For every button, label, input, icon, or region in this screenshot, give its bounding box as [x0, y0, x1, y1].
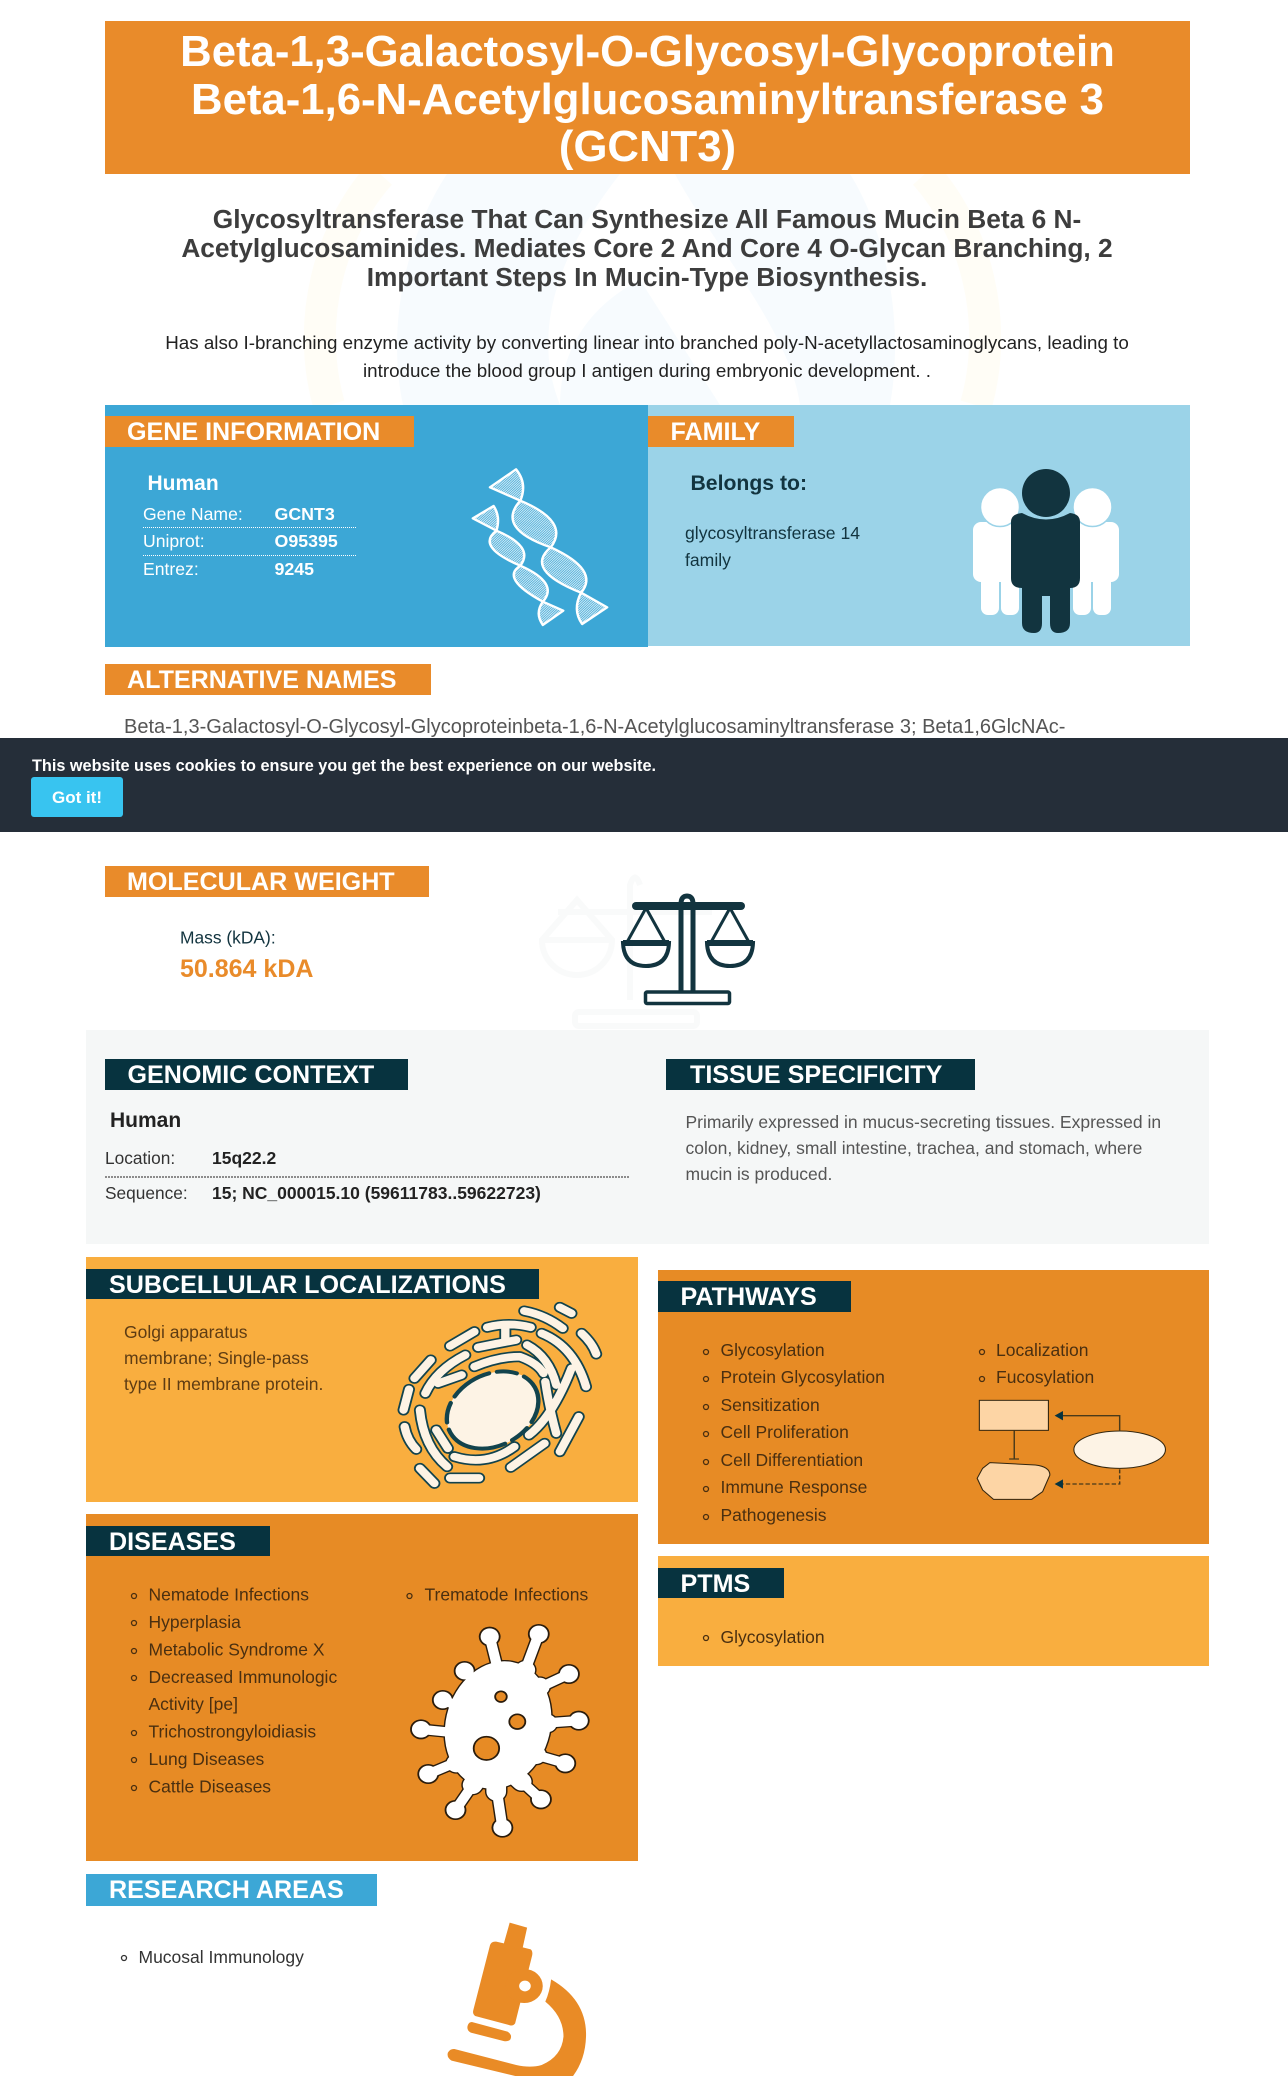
heading: subcellular localizations: SUBCELLULAR LOCALIZATIONS	[109, 1271, 506, 1299]
heading: family	[648, 416, 794, 447]
icon: microscope	[448, 1922, 586, 2076]
tissue specificity text: mucin is produced.	[686, 1164, 832, 1184]
diseases list	[132, 1584, 588, 1796]
pathways list	[704, 1340, 1094, 1525]
pathways list: Glycosylation	[720, 1340, 825, 1360]
title banner	[105, 21, 1190, 174]
tissue specificity text: colon, kidney, small intestine, trachea, and stomach, where	[686, 1138, 1142, 1158]
button: got it: Got it!	[52, 788, 102, 807]
cookie bar: This website uses cookies to ensure you get the best experience on our website.	[32, 757, 656, 775]
faint scale watermark	[542, 878, 712, 1026]
diseases list: Lung Diseases	[148, 1749, 265, 1769]
panel: pathways	[658, 1270, 1209, 1544]
ptms list: Glycosylation	[720, 1627, 825, 1647]
molecular weight value: Mass (kDA):	[180, 928, 276, 948]
heading: tissue specificity: TISSUE SPECIFICITY	[690, 1061, 943, 1089]
molecular weight value	[180, 928, 313, 983]
genomic context details: Human	[110, 1109, 181, 1132]
title banner: Beta-1,6-N-Acetylglucosaminyltransferase 3	[191, 75, 1104, 124]
research areas list: Mucosal Immunology	[138, 1947, 304, 1967]
diseases list: Hyperplasia	[148, 1612, 241, 1632]
pathways list: Sensitization	[720, 1395, 820, 1415]
gene table: 9245	[274, 559, 314, 579]
family text: Belongs to:	[690, 472, 807, 495]
subtitle: Acetylglucosaminides. Mediates Core 2 And Core 4 O-Glycan Branching, 2	[181, 233, 1113, 263]
pathways list: Immune Response	[720, 1477, 867, 1497]
icon: virus	[410, 1624, 590, 1838]
description: Has also I-branching enzyme activity by converting linear into branched poly-N-acetyllactosaminoglycans, leading to	[165, 332, 1129, 353]
heading: molecular weight: MOLECULAR WEIGHT	[127, 868, 395, 896]
pathways list: Protein Glycosylation	[720, 1367, 885, 1387]
icon: balance scale	[623, 896, 753, 1004]
genomic context details: 15; NC_000015.10 (59611783..59622723)	[212, 1183, 541, 1203]
panel: ptms	[658, 1556, 1209, 1666]
background watermark	[320, 174, 985, 405]
icon: pathway diagram	[976, 1400, 1166, 1500]
diseases list: Cattle Diseases	[148, 1776, 271, 1796]
tissue specificity text	[686, 1112, 1161, 1184]
cookie bar	[0, 738, 1288, 832]
heading: research areas: RESEARCH AREAS	[109, 1876, 344, 1904]
panel: diseases	[86, 1514, 638, 1861]
tissue specificity text: Primarily expressed in mucus-secreting tissues. Expressed in	[686, 1112, 1161, 1132]
localization text: Golgi apparatus	[124, 1322, 248, 1342]
title banner: (GCNT3)	[559, 122, 736, 171]
heading: diseases	[86, 1526, 270, 1556]
gene table: Gene Name:	[143, 504, 243, 524]
gene table: O95395	[274, 531, 338, 551]
heading: pathways	[658, 1281, 851, 1312]
heading: diseases: DISEASES	[109, 1528, 236, 1556]
genomic context details: Location:	[105, 1148, 175, 1168]
family text: glycosyltransferase 14	[685, 523, 860, 543]
description: introduce the blood group I antigen during embryonic development. .	[363, 360, 931, 381]
diseases list: Nematode Infections	[148, 1584, 309, 1604]
pathways list: Cell Proliferation	[720, 1422, 849, 1442]
family text: family	[685, 550, 731, 570]
subtitle	[181, 204, 1113, 292]
panel: gene information	[105, 405, 648, 647]
heading: genomic context: GENOMIC CONTEXT	[128, 1061, 375, 1089]
pathways list: Cell Differentiation	[720, 1450, 863, 1470]
gene table	[143, 472, 357, 579]
gene table: Human	[148, 472, 219, 495]
diseases list: Metabolic Syndrome X	[148, 1640, 325, 1660]
panel: subcellular localizations	[86, 1257, 638, 1502]
description	[165, 332, 1129, 381]
heading: pathways: PATHWAYS	[680, 1283, 817, 1311]
panel: family	[648, 405, 1190, 646]
icon: people	[973, 466, 1119, 633]
gene table: Uniprot:	[143, 531, 205, 551]
alternative names text: Beta-1,3-Galactosyl-O-Glycosyl-Glycoproteinbeta-1,6-N-Acetylglucosaminyltransferase 3; Beta1,6GlcNAc-	[124, 716, 1065, 738]
genomic context details: Sequence:	[105, 1183, 188, 1203]
icon: golgi apparatus	[398, 1302, 602, 1489]
genomic context details: 15q22.2	[212, 1148, 276, 1168]
pathways list: Pathogenesis	[720, 1505, 827, 1525]
subtitle: Glycosyltransferase That Can Synthesize All Famous Mucin Beta 6 N-	[213, 204, 1081, 234]
panel: genomic context and tissue specificity	[86, 1030, 1209, 1244]
heading: ptms	[658, 1568, 784, 1598]
button: got it	[31, 777, 123, 817]
localization text: type II membrane protein.	[124, 1374, 323, 1394]
gene table: Entrez:	[143, 559, 199, 579]
pathways list: Localization	[996, 1340, 1088, 1360]
heading: ptms: PTMS	[680, 1570, 750, 1598]
localization text	[124, 1322, 323, 1394]
diseases list: Decreased Immunologic	[148, 1667, 337, 1687]
subtitle: Important Steps In Mucin-Type Biosynthesis.	[367, 262, 927, 292]
diseases list: Activity [pe]	[148, 1694, 238, 1714]
localization text: membrane; Single-pass	[124, 1348, 309, 1368]
icon: dna helices	[472, 468, 608, 626]
family text	[685, 472, 860, 570]
molecular weight value: 50.864 kDA	[180, 955, 313, 983]
heading: alternative names: ALTERNATIVE NAMES	[127, 666, 397, 694]
genomic context details	[105, 1109, 629, 1203]
heading: family: FAMILY	[670, 418, 760, 446]
pathways list: Fucosylation	[996, 1367, 1094, 1387]
diseases list: Trichostrongyloidiasis	[148, 1722, 316, 1742]
heading: gene information: GENE INFORMATION	[127, 418, 380, 446]
gene table: GCNT3	[274, 504, 335, 524]
diseases list: Trematode Infections	[424, 1584, 588, 1604]
title banner: Beta-1,3-Galactosyl-O-Glycosyl-Glycoprotein	[180, 27, 1115, 76]
